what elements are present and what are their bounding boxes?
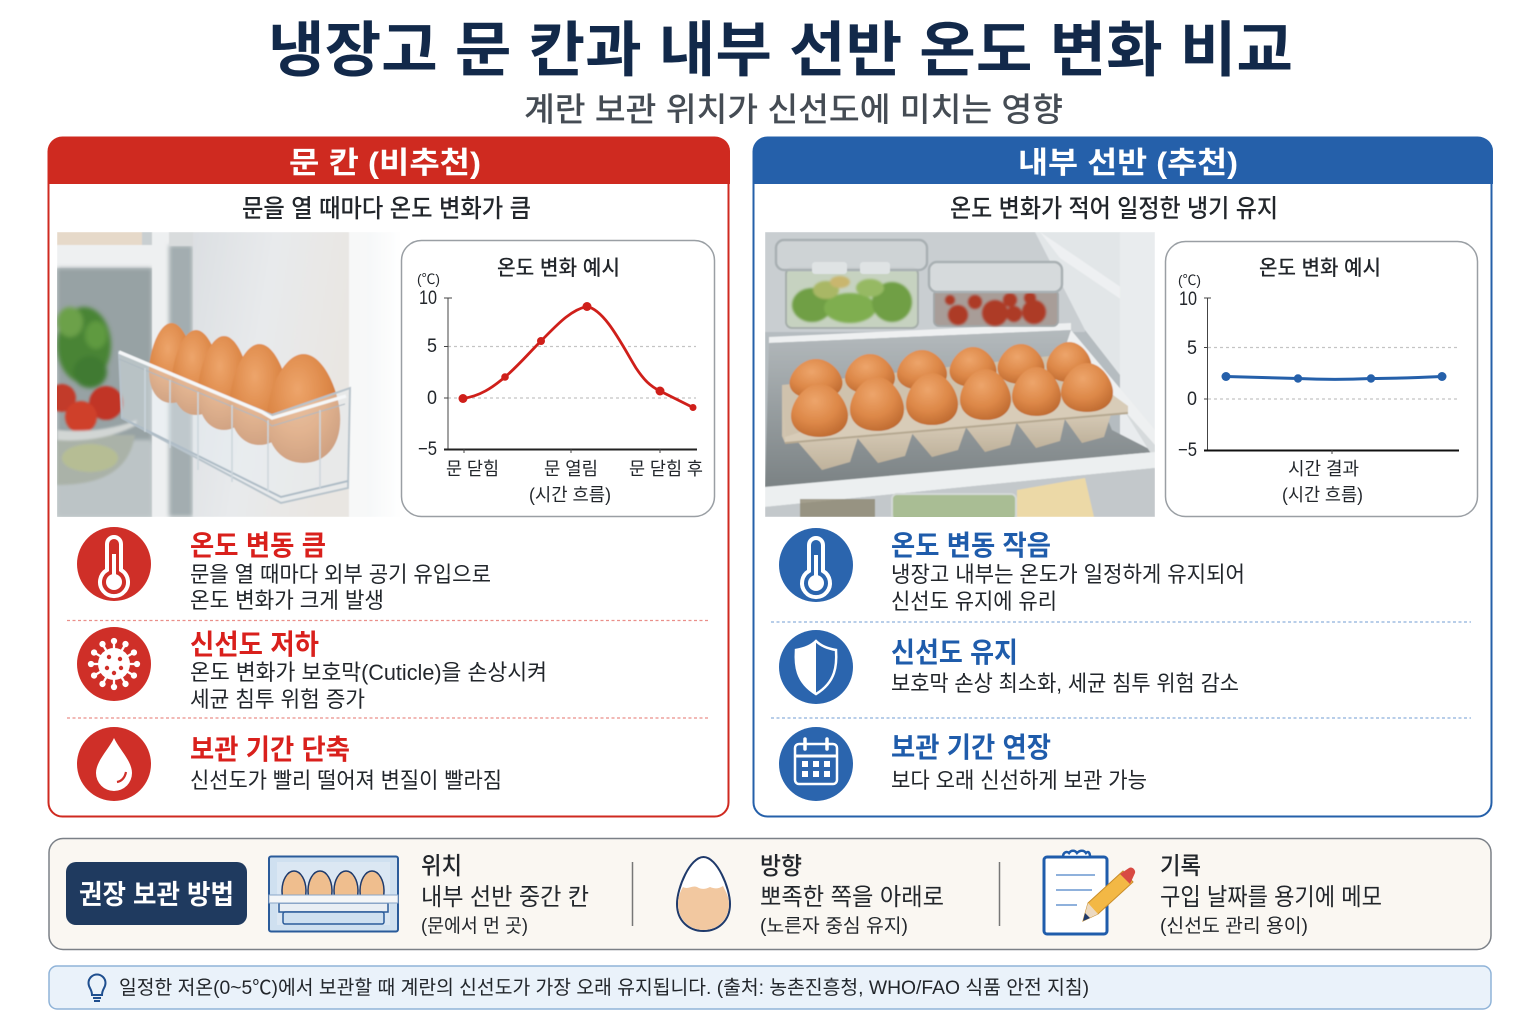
badge: recommended storage xyxy=(66,862,247,925)
front eggs xyxy=(791,363,1113,437)
text: large temperature swing xyxy=(190,530,491,613)
text: large temperature swing: 문을 열 때마다 외부 공기 유입으로 xyxy=(190,562,491,587)
carton front lip xyxy=(785,394,1128,442)
chart card: inner shelf temperature: −5 xyxy=(1178,440,1197,461)
shelf rail and lower items xyxy=(765,452,1155,507)
text: small temperature swing: 냉장고 내부는 온도가 일정하게 유지되어 xyxy=(891,562,1245,587)
text: small temperature swing xyxy=(891,530,1245,614)
chart card: inner shelf temperature xyxy=(1166,242,1478,516)
icon: bacteria xyxy=(77,627,151,701)
chart card: inner shelf temperature: (시간 흐름) xyxy=(1282,485,1363,505)
panel: inner shelf xyxy=(753,137,1493,816)
text: longer storage xyxy=(891,732,1147,793)
icon: shelf with eggs xyxy=(269,856,398,932)
text: large temperature swing: 온도 변화가 크게 발생 xyxy=(190,588,384,613)
chart card: door shelf temperature: 10 xyxy=(419,288,437,309)
text: freshness declines: 온도 변화가 보호막(Cuticle)을 손상시켜 xyxy=(190,660,547,685)
lettuce container xyxy=(776,240,927,328)
icon: thermometer red xyxy=(77,527,151,601)
subtitle: 계란 보관 위치가 신선도에 미치는 영향 xyxy=(524,91,1063,128)
chart card: door shelf temperature: 5 xyxy=(427,336,437,357)
text: record: (신선도 관리 용이) xyxy=(1160,915,1308,937)
tray xyxy=(119,352,350,503)
icon: thermometer blue xyxy=(779,528,853,602)
panel header: inner shelf: 내부 선반 (추천) xyxy=(1018,147,1238,180)
chart card: door shelf temperature: −5 xyxy=(418,439,437,460)
note bar xyxy=(49,966,1491,1009)
text: location: (문에서 먼 곳) xyxy=(421,915,528,937)
note bar: 일정한 저온(0~5℃)에서 보관할 때 계란의 신선도가 가장 오래 유지됩니다. (출처: 농촌진흥청, WHO/FAO 식품 안전 지침) xyxy=(119,977,1089,999)
chart card: door shelf temperature: 온도 변화 예시 xyxy=(497,257,620,280)
text: freshness declines: 세균 침투 위험 증가 xyxy=(190,687,365,712)
icon: egg pointed end down xyxy=(677,857,730,931)
panel subheading: inner shelf: 온도 변화가 적어 일정한 냉기 유지 xyxy=(950,195,1278,223)
photo: eggs on inner shelf xyxy=(765,232,1155,520)
text: freshness declines: 신선도 저하 xyxy=(190,629,319,660)
text: location: 내부 선반 중간 칸 xyxy=(421,884,589,911)
chart card: door shelf temperature: (℃) xyxy=(417,271,440,287)
line series: inner shelf xyxy=(1222,372,1446,383)
text: freshness maintained xyxy=(891,637,1239,696)
text: direction: 방향 xyxy=(760,853,802,880)
text: direction: 뽀족한 쪽을 아래로 xyxy=(760,884,944,911)
chart card: inner shelf temperature: 0 xyxy=(1187,389,1197,410)
text: small temperature swing: 온도 변동 작음 xyxy=(891,530,1051,561)
carton dimples xyxy=(797,411,1112,470)
chart card: door shelf temperature: 문 닫힘 후 xyxy=(629,459,703,479)
text: direction: (노른자 중심 유지) xyxy=(760,915,908,937)
tomato container xyxy=(929,262,1062,326)
icon: clipboard and pencil xyxy=(1044,851,1135,934)
panel header: door shelf: 문 칸 (비추천) xyxy=(289,147,481,180)
photo: eggs in door tray xyxy=(57,232,370,517)
panel header: door shelf xyxy=(48,137,730,184)
text: small temperature swing: 신선도 유지에 유리 xyxy=(891,589,1057,614)
chart card: inner shelf temperature: 10 xyxy=(1179,289,1197,310)
badge: recommended storage: 권장 보관 방법 xyxy=(79,880,234,910)
icon: calendar xyxy=(779,727,853,801)
text: shorter storage: 신선도가 빨리 떨어져 변질이 빨라짐 xyxy=(190,768,502,793)
chart card: door shelf temperature: (시간 흐름) xyxy=(529,485,611,505)
line series: door shelf xyxy=(458,302,696,411)
text: freshness maintained: 보호막 손상 최소화, 세균 침투 위험 감소 xyxy=(891,671,1239,696)
text: shorter storage xyxy=(190,734,502,793)
tomatoes and bowl xyxy=(48,384,137,485)
panel subheading: door shelf: 문을 열 때마다 온도 변화가 큼 xyxy=(242,195,531,223)
text: longer storage: 보다 오래 신선하게 보관 가능 xyxy=(891,768,1147,793)
chart card: inner shelf temperature: 시간 결과 xyxy=(1288,459,1359,479)
text: record: 구입 날짜를 용기에 메모 xyxy=(1160,884,1382,911)
text: freshness maintained: 신선도 유지 xyxy=(891,637,1018,668)
text: freshness declines xyxy=(190,629,547,712)
chart card: door shelf temperature: 문 닫힘 xyxy=(446,459,499,479)
icon: light bulb xyxy=(88,974,106,1001)
panel: recommended storage xyxy=(49,838,1491,950)
icon: water drop xyxy=(77,727,151,801)
chart card: inner shelf temperature: 5 xyxy=(1187,338,1197,359)
chart card: door shelf temperature: 0 xyxy=(427,388,437,409)
egg carton back xyxy=(782,356,1064,442)
title: 냉장고 문 칸과 내부 선반 온도 변화 비교 xyxy=(268,17,1293,84)
panel header: inner shelf xyxy=(753,137,1493,184)
text: large temperature swing: 온도 변동 큼 xyxy=(190,530,326,561)
icon: shield xyxy=(779,630,853,704)
eggs xyxy=(148,322,186,404)
text: shorter storage: 보관 기간 단축 xyxy=(190,734,350,765)
back eggs xyxy=(790,342,1092,399)
text: direction xyxy=(760,853,944,937)
chart card: door shelf temperature xyxy=(402,240,714,516)
text: location xyxy=(421,853,589,937)
text: location: 위치 xyxy=(421,853,462,880)
chart card: inner shelf temperature: (℃) xyxy=(1178,272,1201,288)
chart card: inner shelf temperature: 온도 변화 예시 xyxy=(1259,257,1381,280)
text: longer storage: 보관 기간 연장 xyxy=(891,732,1051,763)
panel: door shelf xyxy=(48,137,730,816)
chart card: door shelf temperature: 문 열림 xyxy=(544,459,598,479)
lettuce xyxy=(57,307,111,388)
text: record xyxy=(1160,853,1382,937)
text: record: 기록 xyxy=(1160,853,1201,880)
